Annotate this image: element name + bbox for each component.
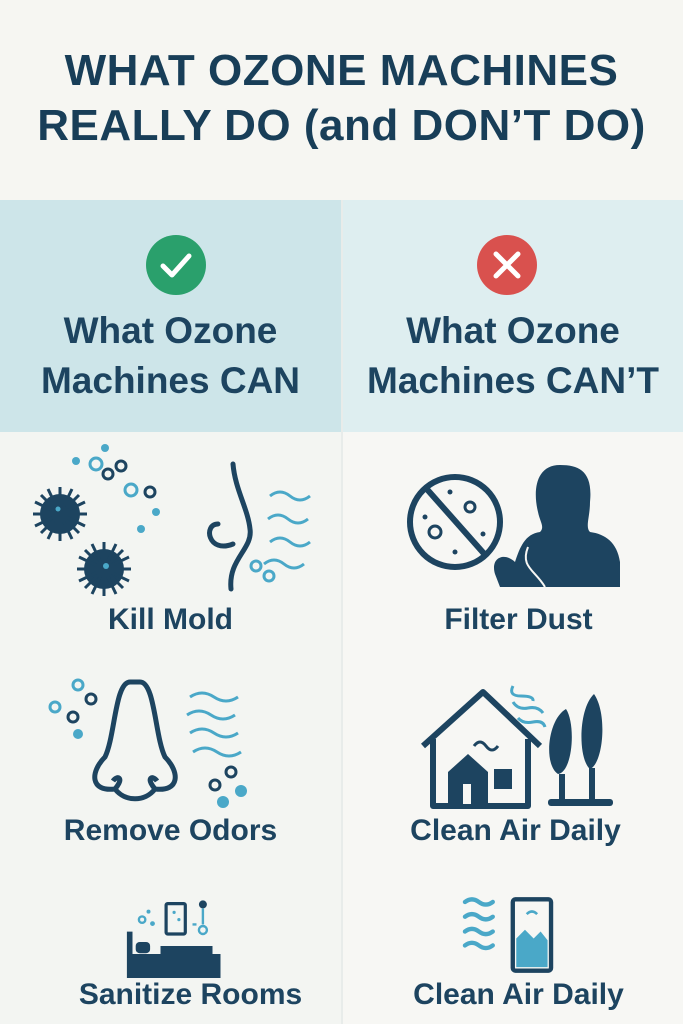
heading: CAN'T: What Ozone	[406, 310, 620, 351]
title: REALLY DO (and DON’T DO)	[37, 101, 646, 150]
heading: CAN	[41, 310, 300, 401]
heading: CAN: Machines CAN	[41, 360, 300, 401]
icon: bedroom	[126, 900, 220, 978]
icon: nose	[48, 678, 247, 808]
icon: no dust and person	[407, 465, 620, 587]
panel: CAN'T header	[343, 200, 683, 432]
panel: CAN items	[0, 432, 341, 1024]
heading: CAN'T: Machines CAN’T	[367, 360, 659, 401]
title	[37, 46, 646, 150]
title: WHAT OZONE MACHINES	[65, 46, 618, 95]
icon: cross	[477, 235, 537, 295]
icon: mold and nose	[33, 444, 311, 596]
label: Remove Odors: Remove Odors	[64, 814, 277, 847]
icon: house and trees	[421, 685, 613, 809]
panel: CAN'T items	[343, 432, 683, 1024]
label: Kill Mold: Kill Mold	[108, 603, 233, 636]
label: Filter Dust: Filter Dust	[444, 603, 593, 636]
panel: CAN header	[0, 200, 341, 432]
icon: check	[146, 235, 206, 295]
label: Clean Air Daily 1: Clean Air Daily	[410, 814, 621, 847]
label: Sanitize Rooms: Sanitize Rooms	[79, 978, 302, 1011]
heading: CAN: What Ozone	[64, 310, 277, 351]
label: Clean Air Daily 2: Clean Air Daily	[413, 978, 624, 1011]
icon: air and window	[462, 897, 554, 973]
heading: CAN'T	[367, 310, 659, 401]
